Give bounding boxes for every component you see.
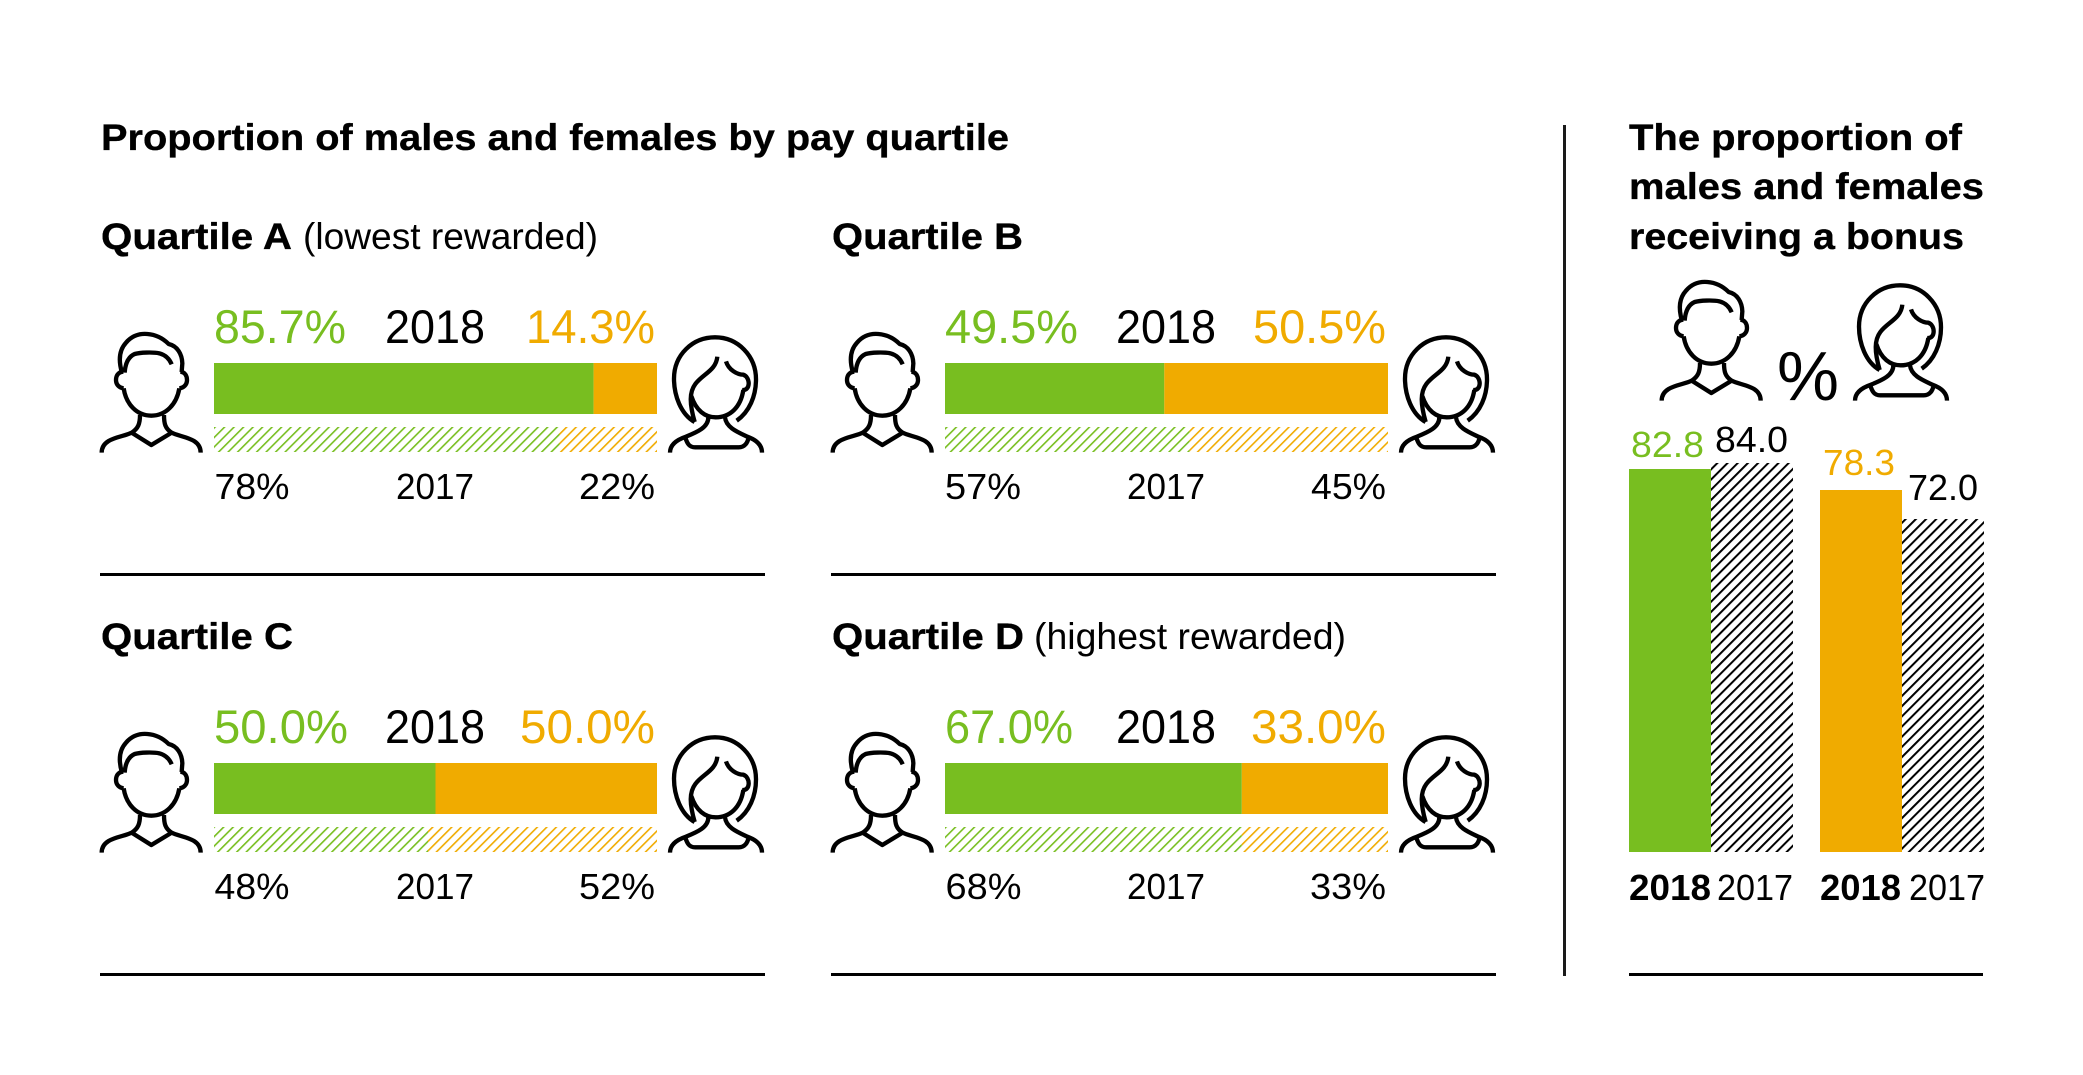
2018 female share: 33.0% — [1251, 700, 1386, 753]
2018 female share: 50.5% — [1253, 300, 1386, 353]
female 2017 hatched bar — [1902, 519, 1984, 852]
heading: Quartile D: Quartile D — [832, 615, 1024, 657]
2018 male share: 49.5% — [945, 300, 1078, 353]
2018 female share: 50.0% — [520, 700, 655, 753]
2018 stacked bar — [214, 763, 657, 814]
2018 stacked bar — [214, 363, 657, 414]
icon: man — [102, 334, 201, 453]
2018 label: 2018 — [385, 300, 485, 353]
male 2017 hatched bar — [1711, 463, 1793, 852]
label: male 2018: 2018 — [1629, 867, 1711, 908]
2017 label: 2017 — [396, 866, 474, 907]
icon: man — [833, 734, 932, 853]
rule — [831, 573, 1496, 576]
2018 label: 2018 — [1116, 700, 1216, 753]
male 2017 value: 84.0 — [1715, 419, 1788, 460]
2017 female share: 22% — [579, 466, 655, 507]
panel: Quartile D — [831, 615, 1496, 976]
male 2018 value: 82.8 — [1631, 424, 1704, 465]
heading: Quartile A: Quartile A — [101, 215, 292, 257]
male 2018 bar — [1629, 469, 1711, 852]
2017 label: 2017 — [396, 466, 474, 507]
heading: Quartile C: Quartile C — [101, 615, 293, 657]
icon: woman — [1401, 737, 1493, 853]
label: female 2018: 2018 — [1820, 867, 1901, 908]
heading: bonus: receiving a bonus — [1629, 215, 1964, 257]
main title: Proportion of males and females by pay quartile — [101, 116, 1009, 158]
2018 label: 2018 — [385, 700, 485, 753]
2018 female share: 14.3% — [526, 300, 655, 353]
panel: Quartile A — [100, 215, 765, 576]
icon: woman — [1855, 285, 1947, 401]
2017 female share: 45% — [1311, 466, 1386, 507]
2018 male share: 85.7% — [214, 300, 346, 353]
heading: bonus: males and females — [1629, 165, 1984, 207]
panel: Quartile B — [831, 215, 1496, 576]
icon: man — [102, 734, 201, 853]
2017 male share: 68% — [946, 866, 1022, 907]
icon: man — [833, 334, 932, 453]
2017 hatched bar — [945, 427, 1388, 452]
2017 female share: 33% — [1310, 866, 1386, 907]
panel: bonus proportion — [1629, 116, 1985, 976]
heading: Quartile A: (lowest rewarded) — [303, 215, 598, 257]
label: female 2017: 2017 — [1909, 867, 1985, 908]
percent sign: % — [1777, 337, 1839, 415]
panel: Quartile C — [100, 615, 765, 976]
2017 hatched bar — [214, 827, 657, 852]
female 2018 value: 78.3 — [1823, 442, 1895, 483]
2018 stacked bar — [945, 363, 1388, 414]
icon: woman — [670, 737, 762, 853]
2017 male share: 78% — [214, 466, 290, 507]
heading: Quartile B: Quartile B — [832, 215, 1023, 257]
icon: woman — [1401, 337, 1493, 453]
2018 male share: 67.0% — [945, 700, 1073, 753]
2017 male share: 57% — [945, 466, 1021, 507]
rule — [1629, 973, 1983, 976]
rule — [100, 573, 765, 576]
vertical divider — [1563, 125, 1566, 976]
2018 stacked bar — [945, 763, 1388, 814]
icon: man — [1662, 282, 1761, 401]
2017 male share: 48% — [214, 866, 290, 907]
rule — [100, 973, 765, 976]
heading: bonus: The proportion of — [1629, 116, 1963, 158]
icon: woman — [670, 337, 762, 453]
2017 hatched bar — [214, 427, 657, 452]
female 2017 value: 72.0 — [1908, 467, 1978, 508]
female 2018 bar — [1820, 490, 1902, 852]
2017 female share: 52% — [579, 866, 655, 907]
2017 label: 2017 — [1127, 866, 1205, 907]
heading: Quartile D: (highest rewarded) — [1034, 615, 1346, 657]
rule — [831, 973, 1496, 976]
2018 label: 2018 — [1116, 300, 1216, 353]
2017 hatched bar — [945, 827, 1388, 852]
label: male 2017: 2017 — [1717, 867, 1793, 908]
2017 label: 2017 — [1127, 466, 1205, 507]
2018 male share: 50.0% — [214, 700, 348, 753]
